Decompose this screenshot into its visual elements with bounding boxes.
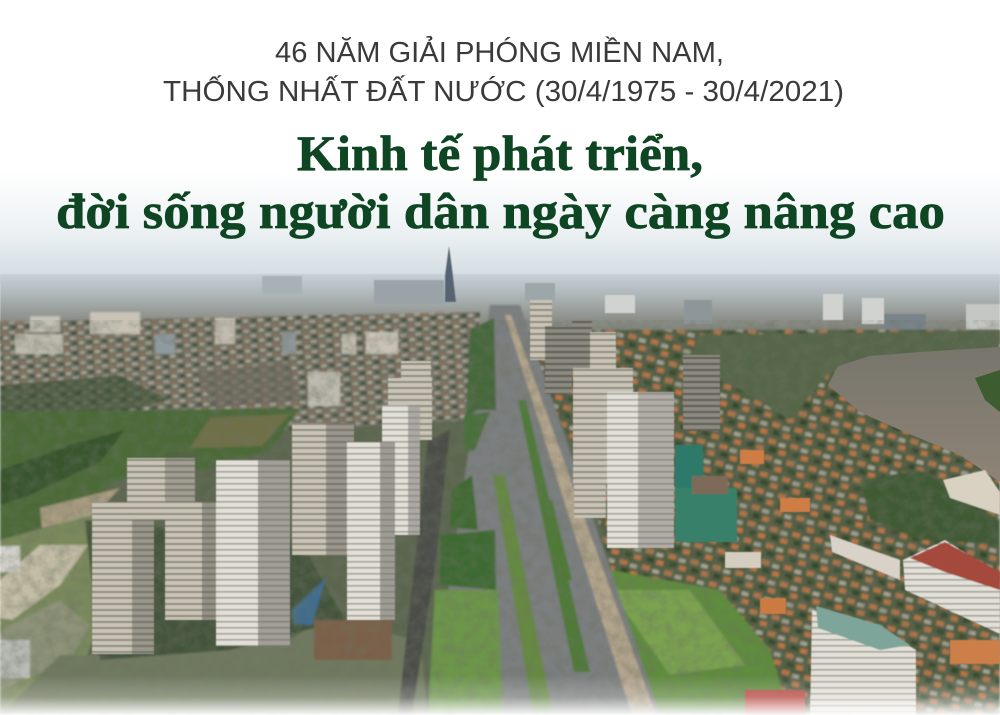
ground base (0, 335, 1000, 715)
left urban district (0, 312, 480, 430)
river (828, 347, 1000, 482)
distant skyline band (0, 246, 1000, 344)
speckle texture (0, 320, 1000, 715)
main title (56, 125, 945, 239)
aerial city photo illustration (0, 246, 1000, 715)
supertitle: 46 NĂM GIẢI PHÓNG MIỀN NAM, (275, 35, 724, 69)
construction building in green netting (675, 445, 737, 542)
bottom white fade (0, 675, 1000, 715)
main title: đời sống người dân ngày càng nâng cao (56, 183, 945, 239)
ground layer (0, 305, 1000, 715)
foreground right buildings (725, 450, 1000, 715)
central highway and green median (398, 305, 660, 715)
brown cleared land (40, 488, 120, 528)
podium and grounds below left towers (0, 620, 428, 715)
river island (975, 370, 1000, 412)
left mid-rise blocks (0, 312, 398, 415)
supertitle: THỐNG NHẤT ĐẤT NƯỚC (30/4/1975 - 30/4/2021) (163, 74, 844, 108)
left residential towers (92, 361, 432, 654)
right residential towers (530, 300, 737, 548)
supertitle (163, 35, 844, 108)
left green field (0, 408, 300, 545)
main title: Kinh tế phát triển, (297, 125, 703, 181)
left lower ground (0, 515, 92, 715)
right neighbourhood with orange roofs (505, 330, 1000, 715)
sky background (0, 0, 1000, 285)
